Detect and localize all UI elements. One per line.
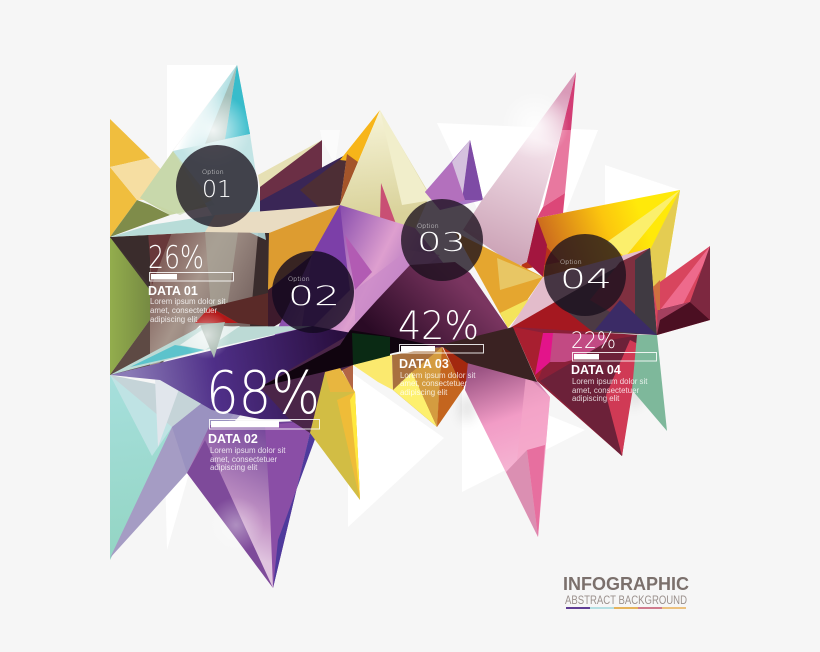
data block 02: adipiscing elit bbox=[210, 463, 258, 472]
data block 02: amet, consectetuer bbox=[210, 455, 277, 464]
data block 01: DATA 01 bbox=[148, 284, 198, 298]
pale green facet bbox=[140, 151, 215, 215]
lavender panel bbox=[110, 395, 245, 558]
purple spike bbox=[187, 420, 320, 588]
right centre facets bbox=[440, 248, 667, 456]
right red prism bbox=[653, 246, 710, 335]
data block 04: DATA 04 bbox=[571, 363, 621, 377]
data block 04: amet, consectetuer bbox=[572, 386, 639, 395]
badge: option 04 bbox=[544, 234, 626, 316]
badge: option 03 bbox=[401, 199, 483, 281]
cream edge bbox=[258, 140, 322, 187]
background white facets bbox=[165, 65, 680, 550]
data block 01: 26% bbox=[148, 240, 204, 276]
data block 01: amet, consectetuer bbox=[150, 306, 217, 315]
violet centre bbox=[270, 205, 508, 375]
progress bar 01 bbox=[150, 272, 234, 281]
progress bar 03 bbox=[400, 344, 484, 353]
orange panel bbox=[268, 205, 340, 290]
badge: option 04: Option bbox=[560, 258, 582, 266]
data block 03: DATA 03 bbox=[399, 357, 449, 371]
white streak bbox=[110, 326, 312, 375]
data block 04: 22% bbox=[571, 329, 616, 354]
plum facet bbox=[350, 262, 508, 350]
teal panel bbox=[110, 375, 172, 560]
lower left facets bbox=[110, 322, 353, 588]
dark centre band bbox=[260, 330, 480, 427]
title block: INFOGRAPHIC bbox=[563, 574, 689, 594]
data block 04 bbox=[571, 329, 656, 403]
navy facet bbox=[260, 154, 347, 225]
data block 02 bbox=[206, 358, 320, 472]
badge: option 01: 01 bbox=[202, 177, 232, 203]
dark panel bbox=[110, 232, 150, 375]
data block 02: DATA 02 bbox=[208, 432, 258, 446]
maroon facet bbox=[260, 140, 322, 225]
badge: option 04: 04 bbox=[560, 264, 612, 295]
badge: option 01 bbox=[176, 145, 258, 227]
badge: option 03: 03 bbox=[417, 228, 466, 258]
dark wedge bbox=[440, 327, 537, 382]
data block 01 bbox=[148, 240, 234, 324]
data block 01: Lorem ipsum dolor sit bbox=[150, 297, 226, 306]
data block 02: Lorem ipsum dolor sit bbox=[210, 446, 286, 455]
dark green facet bbox=[352, 333, 390, 365]
data block 04: adipiscing elit bbox=[572, 394, 620, 403]
badge: option 02 bbox=[272, 251, 354, 333]
cyan spire light bbox=[173, 65, 250, 151]
olive panel bbox=[110, 237, 150, 375]
data block 02: 68% bbox=[206, 358, 320, 427]
teal band bbox=[173, 134, 266, 240]
orange 03 band bbox=[455, 232, 543, 328]
pink spike bbox=[465, 362, 550, 537]
teal spire bbox=[140, 65, 266, 240]
data block 03: 42% bbox=[398, 304, 479, 349]
data block 03: amet, consectetuer bbox=[400, 379, 467, 388]
data block 03: adipiscing elit bbox=[400, 388, 448, 397]
gold triangle lower left bbox=[110, 167, 137, 237]
olive facet bbox=[110, 200, 170, 237]
title block bbox=[563, 574, 689, 609]
data block 04: Lorem ipsum dolor sit bbox=[572, 377, 648, 386]
yellow right panel bbox=[520, 190, 680, 287]
gold triangle top left bbox=[110, 119, 150, 167]
upper dark facets bbox=[110, 140, 347, 330]
light glows bbox=[175, 91, 569, 553]
yellow lower spike bbox=[310, 365, 360, 500]
cyan spire dark bbox=[225, 65, 250, 139]
yellow tip bbox=[340, 110, 380, 162]
cream facet bbox=[110, 158, 190, 200]
violet facet bbox=[270, 205, 445, 375]
pink tall spire bbox=[463, 72, 576, 277]
left facets bbox=[110, 119, 270, 375]
purple band bbox=[110, 326, 352, 420]
red lower facet bbox=[513, 327, 640, 456]
badge: option 02: 02 bbox=[288, 281, 340, 312]
data block 03 bbox=[398, 304, 484, 397]
badge: option 03: Option bbox=[417, 222, 439, 230]
data block 01: adipiscing elit bbox=[150, 315, 198, 324]
violet spire bbox=[425, 140, 483, 210]
yellow mid facet bbox=[353, 355, 393, 390]
title block: ABSTRACT BACKGROUND bbox=[565, 595, 687, 607]
data block 03: Lorem ipsum dolor sit bbox=[400, 371, 476, 380]
green facet bbox=[632, 335, 667, 431]
badge: option 02: Option bbox=[288, 275, 310, 283]
soft shadows bbox=[462, 385, 645, 420]
cream body bbox=[340, 110, 430, 240]
cream spire bbox=[340, 110, 432, 240]
progress bar 04 bbox=[572, 352, 656, 361]
cream strip bbox=[110, 205, 340, 237]
progress bar 02 bbox=[210, 420, 320, 429]
badge: option 01: Option bbox=[202, 168, 224, 176]
